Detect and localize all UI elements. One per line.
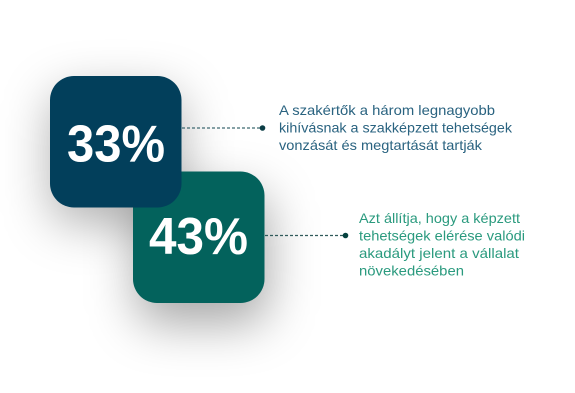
connector: 33% to text [182,125,265,131]
text block: 43% description: Azt állítja, hogy a képzett [359,210,520,226]
card: 43% [133,172,264,303]
text block: 43% description [359,210,525,278]
text block: 33% description: vonzását és megtartását tartják [279,137,483,153]
card shadows [50,92,268,324]
card: 33% [50,76,182,208]
text block: 43% description: növekedésében [359,262,464,278]
stat: 43%: 43% [149,208,248,266]
stat: 33%: 33% [67,116,165,174]
text block: 43% description: tehetségek elérése valódi [359,228,525,244]
text block: 43% description: akadályt jelent a vállalat [359,245,519,261]
connector: 43% to text [265,233,348,238]
text block: 33% description: kihívásnak a szakképzett tehetségek [279,120,513,136]
text block: 33% description: A szakértők a három legnagyobb [279,102,495,118]
text block: 33% description [279,102,513,153]
